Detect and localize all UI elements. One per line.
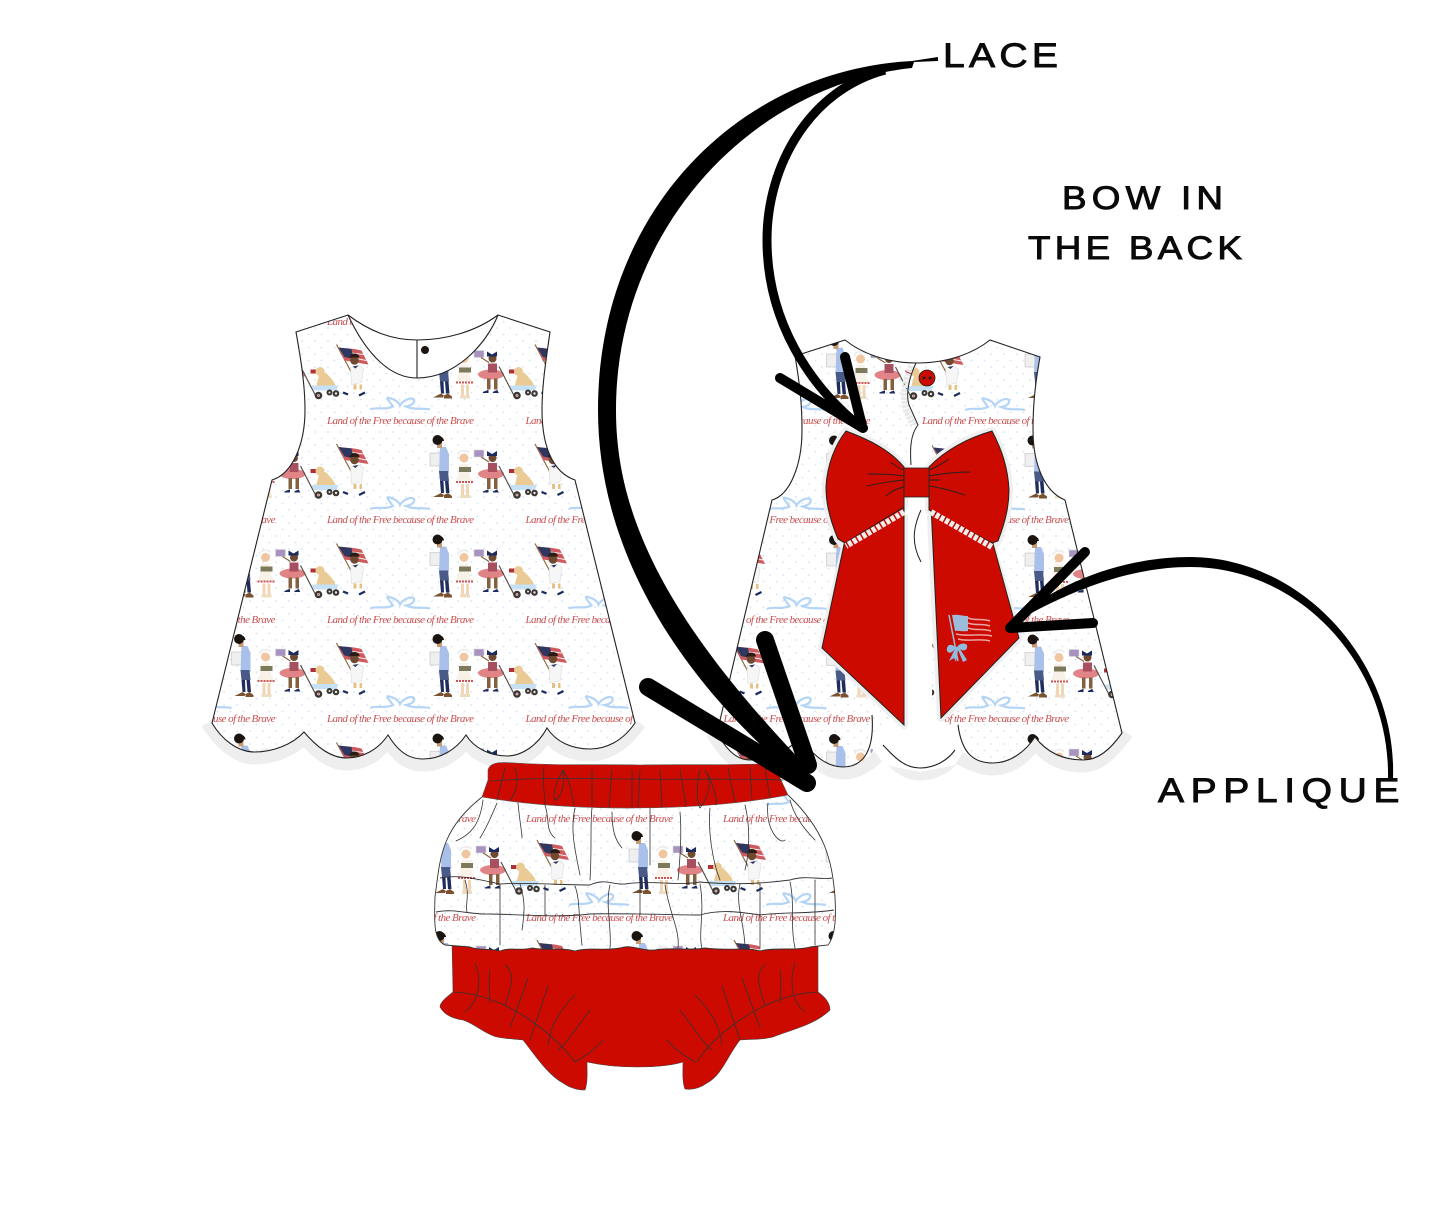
front dress printed fabric: Land of the Free because of the Brave [326,415,474,427]
ruffled printed fabric: Land of the Free because of the Brave [525,912,673,924]
white centre opening between the bow tails [865,425,967,772]
back dress printed fabric: Land of the Free because of the Brave [722,713,871,725]
arrow: LACE thick arc to the bloomers [598,57,938,783]
back dress printed fabric: Land of the Free because of the Brave [921,514,1069,526]
red waistband [482,763,788,808]
back dress printed fabric: Land of the Free because of the Brave [921,415,1069,427]
front dress printed fabric: Land of the Free because of the Brave [326,316,474,328]
placket lace beside the back opening [904,366,915,428]
ruffled printed fabric: Land of the Free because of the Brave [328,813,476,825]
right bow wing [929,431,1009,543]
scalloped lace trim on the front hem [207,723,640,765]
label: APPLIQUE: APPLIQUE [1158,771,1399,809]
scalloped lace trim on the back hem [712,733,1127,774]
back opening line [908,363,921,562]
front dress printed fabric: Land of the Free because of the Brave [524,415,673,427]
red back button [919,370,935,386]
front dress printed fabric: Land of the Free because of the Brave [524,514,673,526]
ruffled printed fabric: Land of the Free because of the Brave [722,912,870,924]
label: BOW IN THE BACK [1028,181,1242,266]
left bow tail [822,505,904,725]
front dress printed fabric: Land of the Free because of the Brave [128,713,276,725]
bloomer red base with leg openings [440,942,830,1090]
back dress printed fabric: Land of the Free because of the Brave [722,514,871,526]
front dress printed fabric: Land of the Free because of the Brave [128,514,276,526]
front button [421,346,429,354]
label: LACE: LACE [943,36,1058,74]
arrow: LACE thin arc to the bow [767,70,885,428]
left bow wing [826,431,904,543]
collar line and placket [348,315,498,378]
front dress printed fabric: Land of the Free because of the Brave [128,614,276,626]
ruffled printed fabric: Land of the Free because of the Brave [722,813,870,825]
ruffled printed fabric: Land of the Free because of the Brave [328,912,476,924]
waistband gathering lines [490,768,783,808]
front dress printed fabric: Land of the Free because of the Brave [326,514,474,526]
panel: back of dress [700,330,1140,780]
bloomer gathering lines [453,963,818,1062]
ruffle gathering lines [456,800,815,948]
red bow [822,431,1019,725]
lace trim on bow [846,512,992,547]
ruffled printed fabric: Land of the Free because of the Brave [525,813,673,825]
front dress printed fabric: Land of the Free because of the Brave [524,614,673,626]
label: BOW IN THE BACK: THE BACK [1028,231,1242,266]
panel: front of dress [202,314,645,772]
panel: ruffled bloomers [434,762,836,1090]
arrow: APPLIQUE arc to the flag [1005,552,1393,778]
front dress printed fabric: Land of the Free because of the Brave [326,713,474,725]
front dress outline [212,315,635,759]
back dress printed fabric [723,340,1122,766]
front dress printed fabric: Land of the Free because of the Brave [326,614,474,626]
front dress printed fabric: Land of the Free because of the Brave [128,415,276,427]
front dress printed fabric: Land of the Free because of the Brave [524,713,673,725]
back dress printed fabric: Land of the Free because of the Brave [921,713,1069,725]
ruffle outlines [435,795,835,951]
applique: American flag with bow [947,615,992,662]
label: BOW IN THE BACK: BOW IN [1062,181,1223,216]
bow pleat lines [867,459,970,496]
ruffled printed fabric [435,795,835,951]
front dress printed fabric [212,318,634,758]
back dress outline [717,340,1122,768]
right bow tail [931,505,1019,718]
back dress printed fabric: Land of the Free because of the Brave [921,614,1069,626]
back dress printed fabric: Land of the Free because of the Brave [722,614,871,626]
back dress printed fabric: Land of the Free because of the Brave [722,415,871,427]
bow knot [904,468,929,497]
